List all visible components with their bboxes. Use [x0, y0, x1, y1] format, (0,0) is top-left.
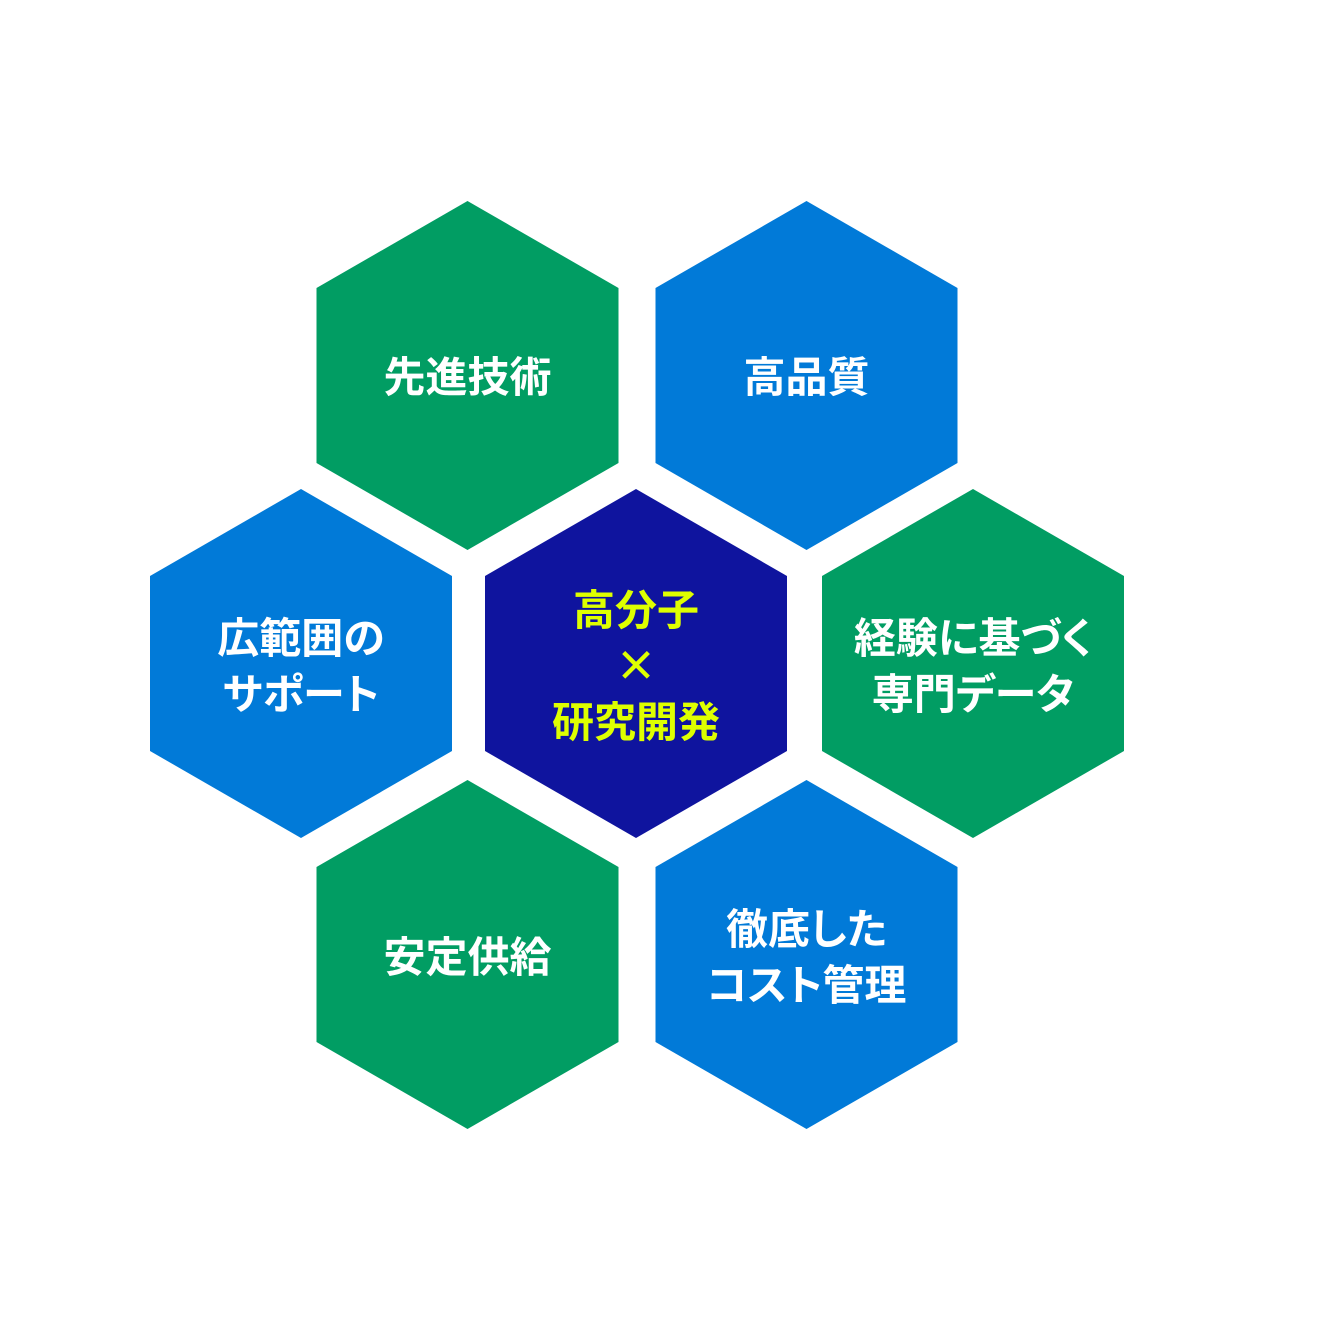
hexagon: center 高分子×研究開発: 高分子	[573, 577, 699, 638]
hexagon: 徹底したコスト管理: 徹底した	[726, 896, 887, 957]
hexagon: 徹底したコスト管理: コスト管理	[707, 952, 906, 1013]
hexagon: 広範囲のサポート: 広範囲の	[217, 605, 385, 666]
hexagon: 先進技術	[316, 201, 618, 550]
hexagon: 高品質: 高品質	[743, 344, 870, 405]
hexagon: center 高分子×研究開発: ×	[615, 633, 657, 694]
hexagon: 徹底したコスト管理	[656, 780, 958, 1129]
hexagon: 安定供給	[316, 780, 618, 1129]
hexagon: 広範囲のサポート: サポート	[223, 661, 379, 722]
hexagon: 経験に基づく専門データ	[822, 489, 1124, 838]
hexagon: 経験に基づく専門データ: 経験に基づく	[854, 605, 1092, 666]
hexagon: 安定供給: 安定供給	[383, 924, 552, 985]
hexagon: 先進技術: 先進技術	[383, 344, 552, 405]
hexagon: center 高分子×研究開発	[485, 489, 787, 838]
hexagon: 広範囲のサポート	[150, 489, 452, 838]
hexagon: 経験に基づく専門データ: 専門データ	[872, 661, 1074, 722]
hexagon: center 高分子×研究開発: 研究開発	[552, 689, 720, 750]
hexagon: 高品質	[656, 201, 958, 550]
